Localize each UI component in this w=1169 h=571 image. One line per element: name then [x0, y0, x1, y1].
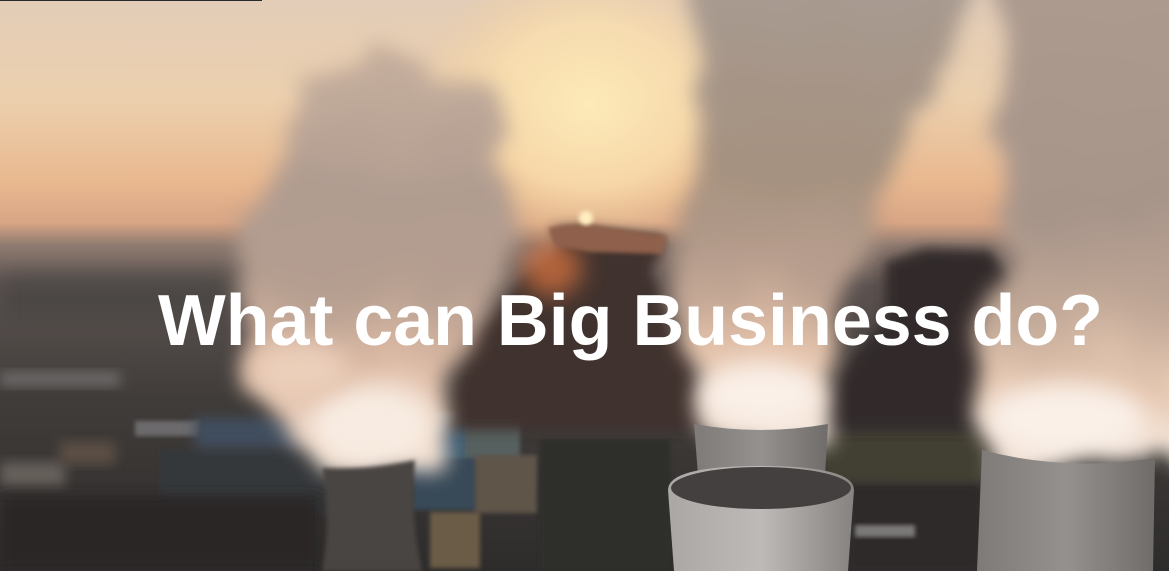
distant power plant silhouette	[445, 211, 1169, 470]
smoke plume: right tower	[975, 0, 1169, 470]
smoke plume: left tower	[240, 63, 525, 470]
cooling tower: left	[322, 460, 422, 571]
cooling tower: right	[977, 450, 1155, 571]
cooling tower: center front	[668, 466, 854, 571]
headline: What can Big Business do?	[158, 281, 1103, 361]
sun glow	[415, 0, 765, 255]
smoke plume: center towers	[655, 0, 985, 440]
top edge strip	[0, 0, 262, 1]
city below the horizon	[0, 278, 985, 571]
cooling tower: center back	[694, 424, 828, 475]
